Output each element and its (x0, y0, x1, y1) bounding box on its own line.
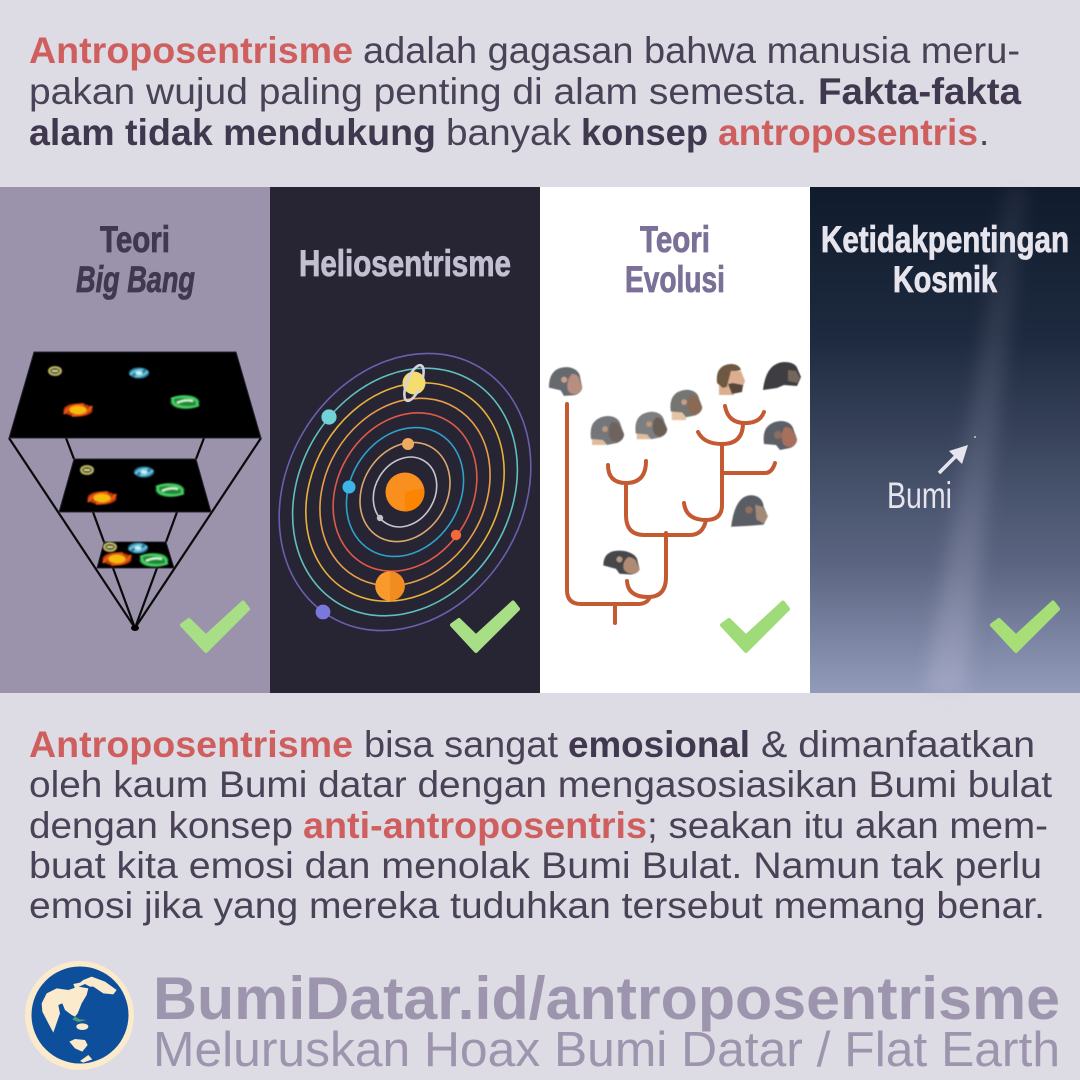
diagram: expanding universe (9, 352, 261, 631)
body text block: dengan konsep (29, 805, 293, 846)
body text block: Antroposentrisme (29, 724, 353, 765)
panel: Teori Evolusi (540, 187, 810, 693)
intro text block: adalah gagasan bahwa manusia meru- (363, 30, 1020, 71)
body text block: oleh kaum Bumi datar dengan mengasosiasikan Bumi bulat (29, 764, 1053, 805)
icon: check mark (722, 602, 788, 651)
tagline: Meluruskan Hoax Bumi Datar / Flat Earth (153, 1023, 1060, 1077)
panel: Heliosentrisme (229, 187, 581, 693)
heading: Teori Evolusi: Evolusi (625, 259, 725, 300)
heading: Heliosentrisme: Heliosentrisme (299, 243, 511, 284)
intro text block (29, 30, 1021, 153)
body text block: buat kita emosi dan menolak Bumi Bulat. Namun tak perlu (29, 845, 1042, 886)
intro text block: . (979, 112, 989, 153)
body text block: emosi jika yang mereka tuduhkan tersebut memang benar. (29, 885, 1045, 926)
body text block: bisa sangat (364, 724, 559, 765)
icon: check mark (992, 602, 1058, 651)
diagram: solar system (229, 307, 581, 677)
sunbeam (925, 187, 1028, 693)
intro text block: banyak (446, 112, 572, 153)
intro text block: antroposentris (718, 112, 978, 153)
body text block: & dimanfaatkan (761, 724, 1035, 765)
logo: globe (25, 961, 134, 1070)
icon: check mark (452, 602, 518, 651)
panel: Teori Big Bang (0, 187, 270, 693)
site name: BumiDatar.id/antroposentrisme (153, 965, 1060, 1032)
body text block: ; seakan itu akan mem- (647, 805, 1048, 846)
intro text block: alam tidak mendukung (29, 112, 436, 153)
arrow to Earth (939, 445, 968, 473)
label: Bumi: Bumi (887, 475, 952, 516)
body text block (29, 724, 1053, 926)
body text block: emosional (568, 724, 750, 765)
icons: hominid heads (548, 362, 801, 578)
intro text block: Antroposentrisme (29, 30, 353, 71)
heading: Teori Big Bang: Teori (100, 219, 170, 260)
heading: Teori Big Bang (76, 219, 195, 300)
icon: check mark (182, 602, 248, 651)
heading: Ketidakpentingan Kosmik: Kosmik (893, 259, 997, 300)
heading: Ketidakpentingan Kosmik (821, 219, 1069, 300)
intro text block: Fakta-fakta (818, 71, 1021, 112)
Earth dot (974, 436, 976, 438)
body text block: anti-antroposentris (303, 805, 647, 846)
heading: Teori Big Bang: Big Bang (76, 259, 195, 300)
intro text block: pakan wujud paling penting di alam semesta. (29, 71, 807, 112)
heading: Teori Evolusi: Teori (640, 219, 710, 260)
intro text block: konsep (581, 112, 708, 153)
diagram: hominid tree (567, 404, 775, 623)
panel: Ketidakpentingan Kosmik (810, 187, 1080, 693)
heading: Teori Evolusi (625, 219, 725, 300)
